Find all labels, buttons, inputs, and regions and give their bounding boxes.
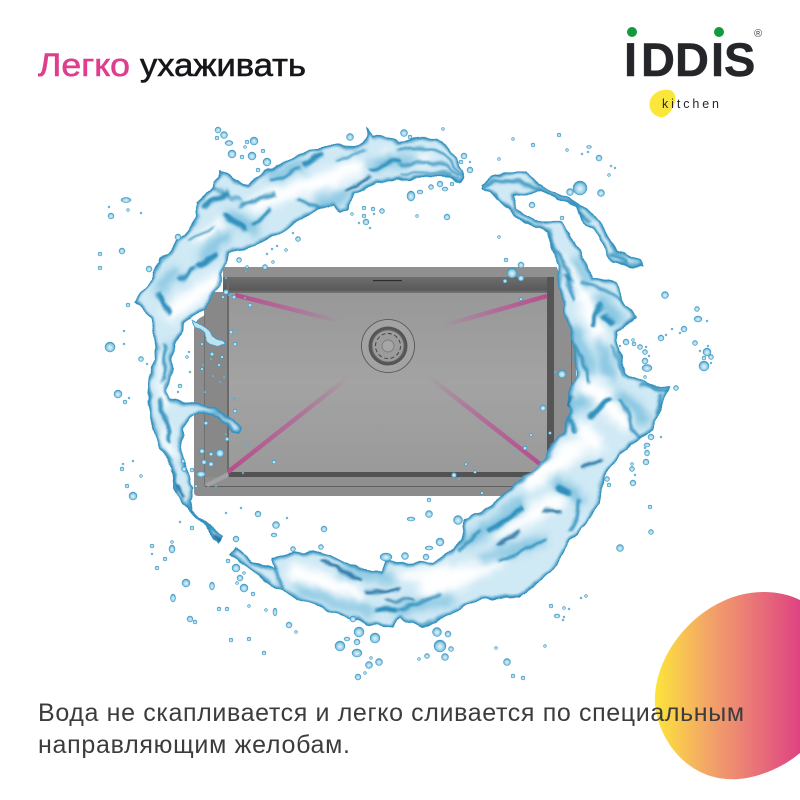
water highlights and shading <box>135 128 670 627</box>
sink front wall <box>229 472 547 477</box>
logo yellow blob <box>649 90 675 117</box>
water inner edge shading <box>135 128 670 627</box>
pink channel bottom left <box>228 376 350 472</box>
body text: Вода не скапливается и легко сливается по специальным <box>38 699 744 727</box>
logo: IDDIS kitchen <box>624 27 762 117</box>
water body right arc and bottom <box>230 172 670 627</box>
gradient blob <box>655 592 800 779</box>
sink floor <box>229 293 547 472</box>
water thin strand left <box>193 320 224 347</box>
title <box>38 47 306 83</box>
sink left wall <box>204 292 229 486</box>
sink rim top <box>223 267 557 277</box>
logo kitchen word: kitchen <box>662 97 719 111</box>
pink channel top right <box>441 296 547 326</box>
title: ухаживать <box>140 47 306 83</box>
body text <box>38 699 744 759</box>
logo wordmark: IDDIS <box>624 33 755 86</box>
water droplets <box>98 127 714 680</box>
registered mark: ® <box>754 28 762 40</box>
body text: направляющим желобам. <box>38 731 350 759</box>
water body upper arc and left tail <box>135 128 464 543</box>
drain <box>362 320 414 372</box>
pink channel top left <box>235 295 342 322</box>
sink <box>194 267 576 496</box>
title: Легко <box>38 47 130 83</box>
sink right wall <box>547 277 554 477</box>
pink channel bottom right <box>428 376 540 464</box>
sink back wall <box>223 277 555 293</box>
logo green dots <box>627 27 724 37</box>
water splash ring <box>135 128 670 627</box>
sink body <box>194 267 576 496</box>
sink overflow slot <box>373 280 402 281</box>
